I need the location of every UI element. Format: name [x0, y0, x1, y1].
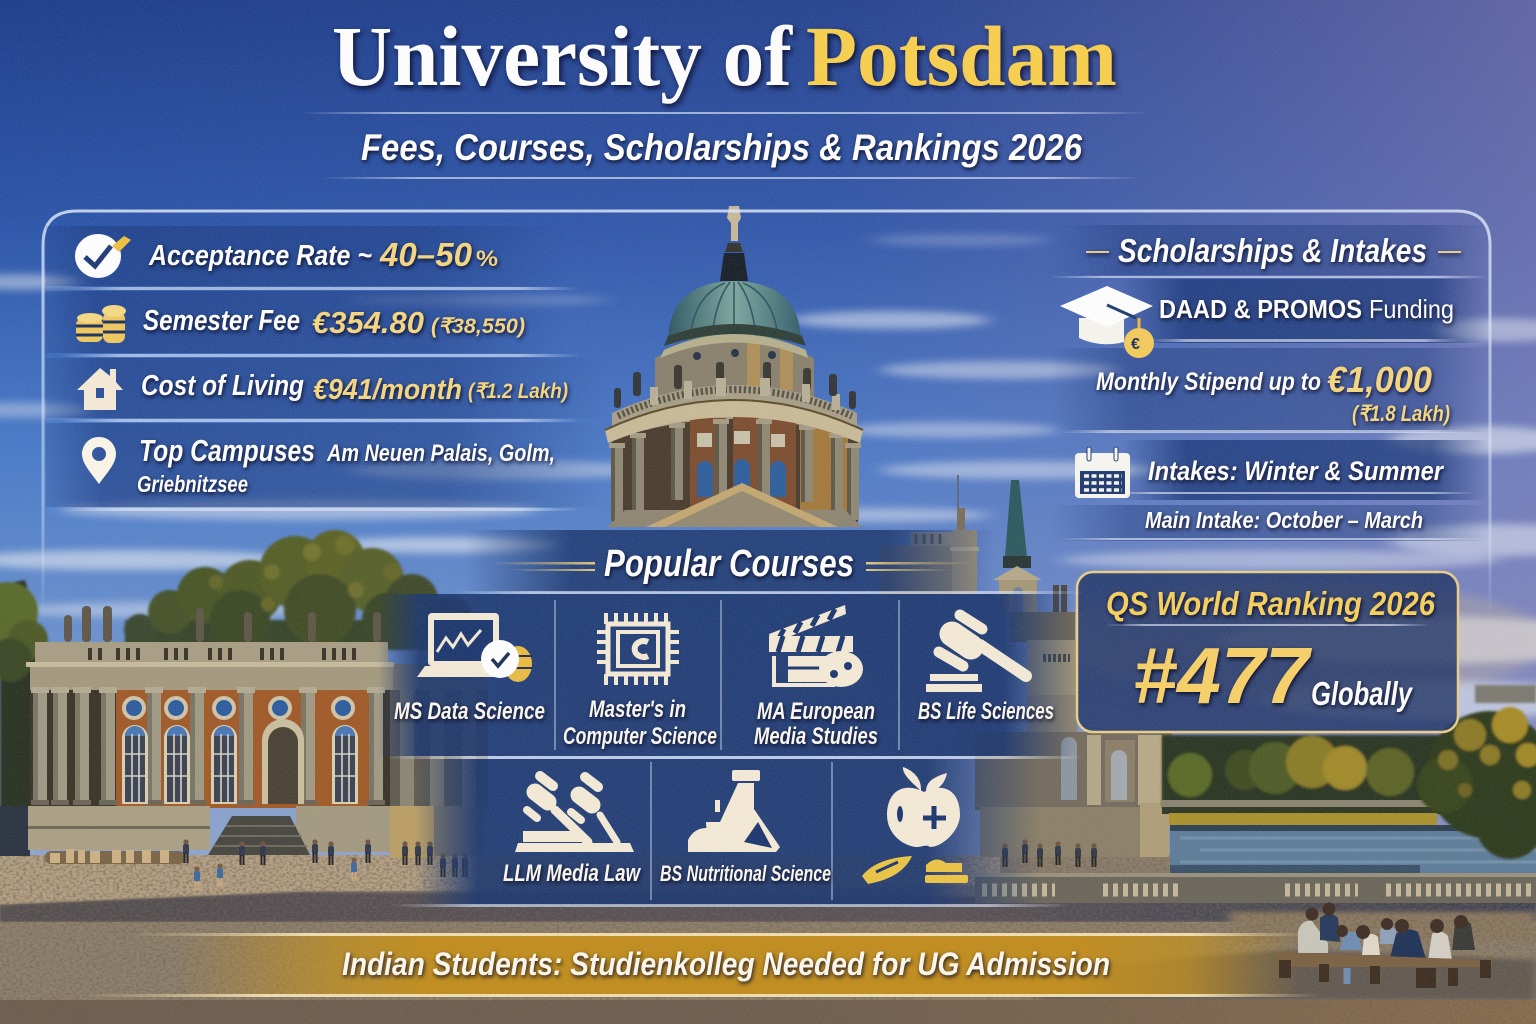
- banner: Indian students: [80, 933, 1320, 997]
- icon: house: [77, 368, 123, 410]
- icon: apple with plus and gold food: [862, 767, 968, 884]
- fact: acceptance rate: Acceptance Rate ~: [148, 240, 372, 272]
- cornice: [605, 400, 863, 443]
- statues on the roofline: [64, 606, 381, 642]
- courses grid rules: [385, 591, 1085, 907]
- wing continuing behind the courses panel: [388, 664, 488, 808]
- callout: QS ranking: [1077, 572, 1458, 732]
- subtitle rule: [320, 177, 1140, 179]
- icon: graduation cap with euro coin: [1060, 286, 1154, 358]
- funding text: DAAD & PROMOS: [1159, 294, 1362, 324]
- course: MS Data Science: MS Data Science: [394, 698, 545, 725]
- course: BS Life Sciences: [918, 615, 1054, 725]
- building: central domed rotunda: [605, 206, 863, 527]
- building: left palace: [0, 606, 488, 858]
- course: MS Data Science: [394, 613, 545, 725]
- heading: scholarships: Scholarships & Intakes: [1118, 232, 1427, 269]
- course: Master's in Computer Science: [563, 613, 717, 750]
- tower: [1005, 480, 1027, 557]
- fact: acceptance rate: %: [476, 246, 498, 271]
- main frame: [43, 211, 1490, 620]
- banner: Indian students: Indian Students: Studienkolleg Needed for UG Admission: [342, 946, 1110, 982]
- drum: [655, 340, 814, 400]
- stipend text: Monthly Stipend up to: [1096, 368, 1321, 396]
- fact: cost of living: Cost of Living: [141, 370, 304, 402]
- icon: check mark badge: [75, 234, 131, 278]
- course: BS Nutritional Science: [660, 770, 831, 886]
- icon: flask and figure: [688, 770, 780, 852]
- icon: gavel: [926, 615, 1026, 692]
- title: [332, 8, 1117, 104]
- icon: two gavels: [527, 776, 617, 842]
- colonnade wall: [612, 419, 858, 522]
- people on the square, left: [45, 839, 468, 890]
- icon: location pin: [82, 437, 116, 484]
- funding text: Funding: [1369, 294, 1454, 324]
- panel: key facts: [46, 226, 606, 511]
- icon: coins: [76, 305, 126, 343]
- course: BS Nutritional Science: BS Nutritional Science: [660, 861, 831, 886]
- stone balustrade: [975, 873, 1536, 903]
- round windows: [122, 696, 355, 720]
- doorway: [262, 719, 304, 804]
- subtitle: Fees, Courses, Scholarships & Rankings 2026: [361, 127, 1082, 168]
- stipend text: [1096, 359, 1450, 426]
- stipend text: (₹1.8 Lakh): [1352, 401, 1450, 426]
- arched windows: [122, 725, 358, 804]
- trees: left group behind building: [0, 530, 490, 810]
- lower right pavilion: [975, 732, 1172, 810]
- scenery: lake and trees at right: [975, 685, 1536, 903]
- fact: semester fee: (₹38,550): [431, 315, 525, 338]
- fact: top campuses: Griebnitzsee: [137, 471, 248, 497]
- fact: acceptance rate: [148, 236, 498, 273]
- fact: semester fee: €354.80: [312, 305, 424, 340]
- icon: calendar: [1075, 447, 1130, 498]
- course: Master's in Computer Science: Master's in: [589, 696, 686, 723]
- balustrade: [612, 385, 857, 430]
- fact: cost of living: €941/month: [313, 374, 462, 406]
- stipend text: €1,000: [1327, 359, 1432, 400]
- course: LLM Media Law: LLM Media Law: [503, 860, 641, 887]
- course: Master's in Computer Science: Computer Science: [563, 723, 717, 750]
- panel: scholarships and intakes: [1050, 225, 1488, 541]
- lantern: [720, 253, 748, 281]
- heading: popular courses: Popular Courses: [604, 543, 854, 585]
- title: University of: [332, 8, 793, 104]
- course: MA European Media Studies: MA European: [757, 698, 875, 725]
- fact: top campuses: Am Neuen Palais, Golm,: [326, 440, 555, 467]
- main intake text: Main Intake: October – March: [1145, 507, 1423, 533]
- title: Potsdam: [806, 8, 1117, 104]
- intakes text: Intakes: Winter & Summer: [1148, 456, 1444, 486]
- callout: QS ranking: #477: [1133, 631, 1312, 720]
- fact: semester fee: Semester Fee: [143, 305, 300, 337]
- icon: clapperboard and palette: [769, 605, 863, 687]
- dome: [668, 281, 801, 340]
- fact: acceptance rate: 40–50: [379, 236, 473, 273]
- fact: top campuses: Top Campuses: [139, 433, 315, 468]
- icon: graduation cap with euro coin: €: [1131, 336, 1140, 353]
- fact: semester fee: [143, 305, 525, 340]
- students on bench: [1272, 902, 1492, 988]
- columns: [31, 687, 385, 805]
- course: BS Life Sciences: BS Life Sciences: [918, 698, 1054, 725]
- title rule top: [300, 112, 1150, 114]
- rotunda columns: [609, 419, 861, 520]
- pediment: [646, 483, 838, 527]
- rotunda windows: [697, 459, 786, 497]
- clouds: [0, 234, 1536, 720]
- course: MA European Media Studies: Media Studies: [754, 723, 878, 750]
- fact: top campuses: [137, 433, 555, 497]
- big tree at right: [1417, 707, 1536, 859]
- callout: QS ranking: Globally: [1311, 675, 1413, 712]
- icon: processor chip: [597, 613, 679, 685]
- course: MA European Media Studies: [754, 605, 878, 750]
- courses panel backdrop: [378, 530, 1073, 905]
- fact: cost of living: [141, 370, 568, 406]
- statue on top of dome: [727, 206, 741, 241]
- ground: cobbled square: [0, 855, 1536, 1024]
- icon: laptop with chart: [417, 613, 532, 682]
- course: LLM Media Law: [503, 776, 641, 887]
- callout: QS ranking: QS World Ranking 2026: [1106, 585, 1436, 622]
- balustrade statues: [614, 372, 856, 409]
- fact: cost of living: (₹1.2 Lakh): [468, 380, 568, 403]
- building: right wing behind courses: [880, 475, 1172, 867]
